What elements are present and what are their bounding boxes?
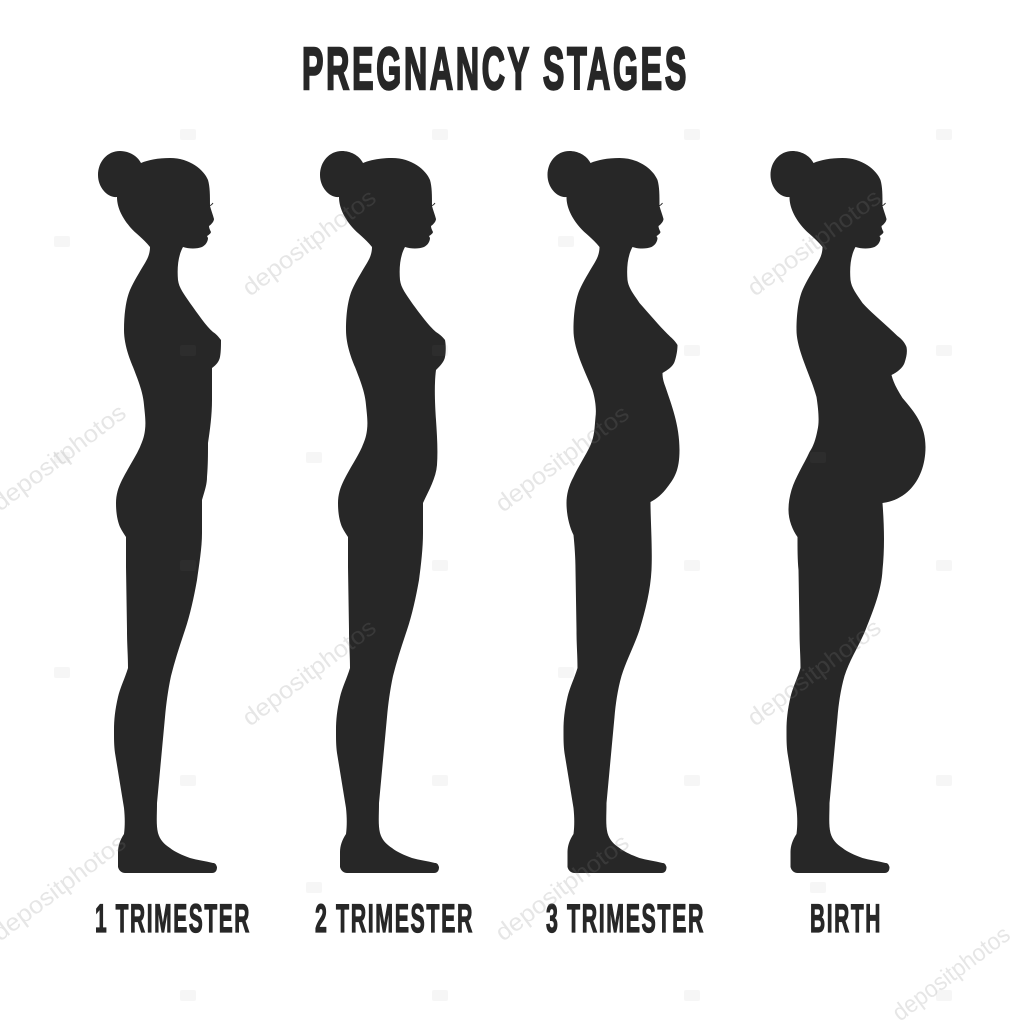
- watermark text: depositphotos: [490, 400, 634, 518]
- watermark text: depositphotos: [887, 921, 1015, 1024]
- watermark text: depositphotos: [237, 184, 381, 302]
- watermark text: depositphotos: [237, 614, 381, 732]
- watermark text: depositphotos: [742, 184, 886, 302]
- watermark camera marks: [54, 129, 952, 1001]
- watermark text: depositphotos: [742, 614, 886, 732]
- label: 1 trimester: 1 TRIMESTER: [95, 897, 251, 941]
- label: 2 trimester: 2 TRIMESTER: [315, 897, 474, 941]
- figure: 2 trimester silhouette: [320, 151, 446, 873]
- figure: birth silhouette: [770, 151, 926, 873]
- label: 3 trimester: 3 TRIMESTER: [546, 897, 705, 941]
- title: PREGNANCY STAGES: [302, 36, 689, 102]
- watermark text: depositphotos: [490, 829, 634, 947]
- figure: 3 trimester silhouette: [548, 151, 680, 873]
- label: birth: BIRTH: [810, 897, 882, 941]
- figure: 1 trimester silhouette: [98, 151, 221, 873]
